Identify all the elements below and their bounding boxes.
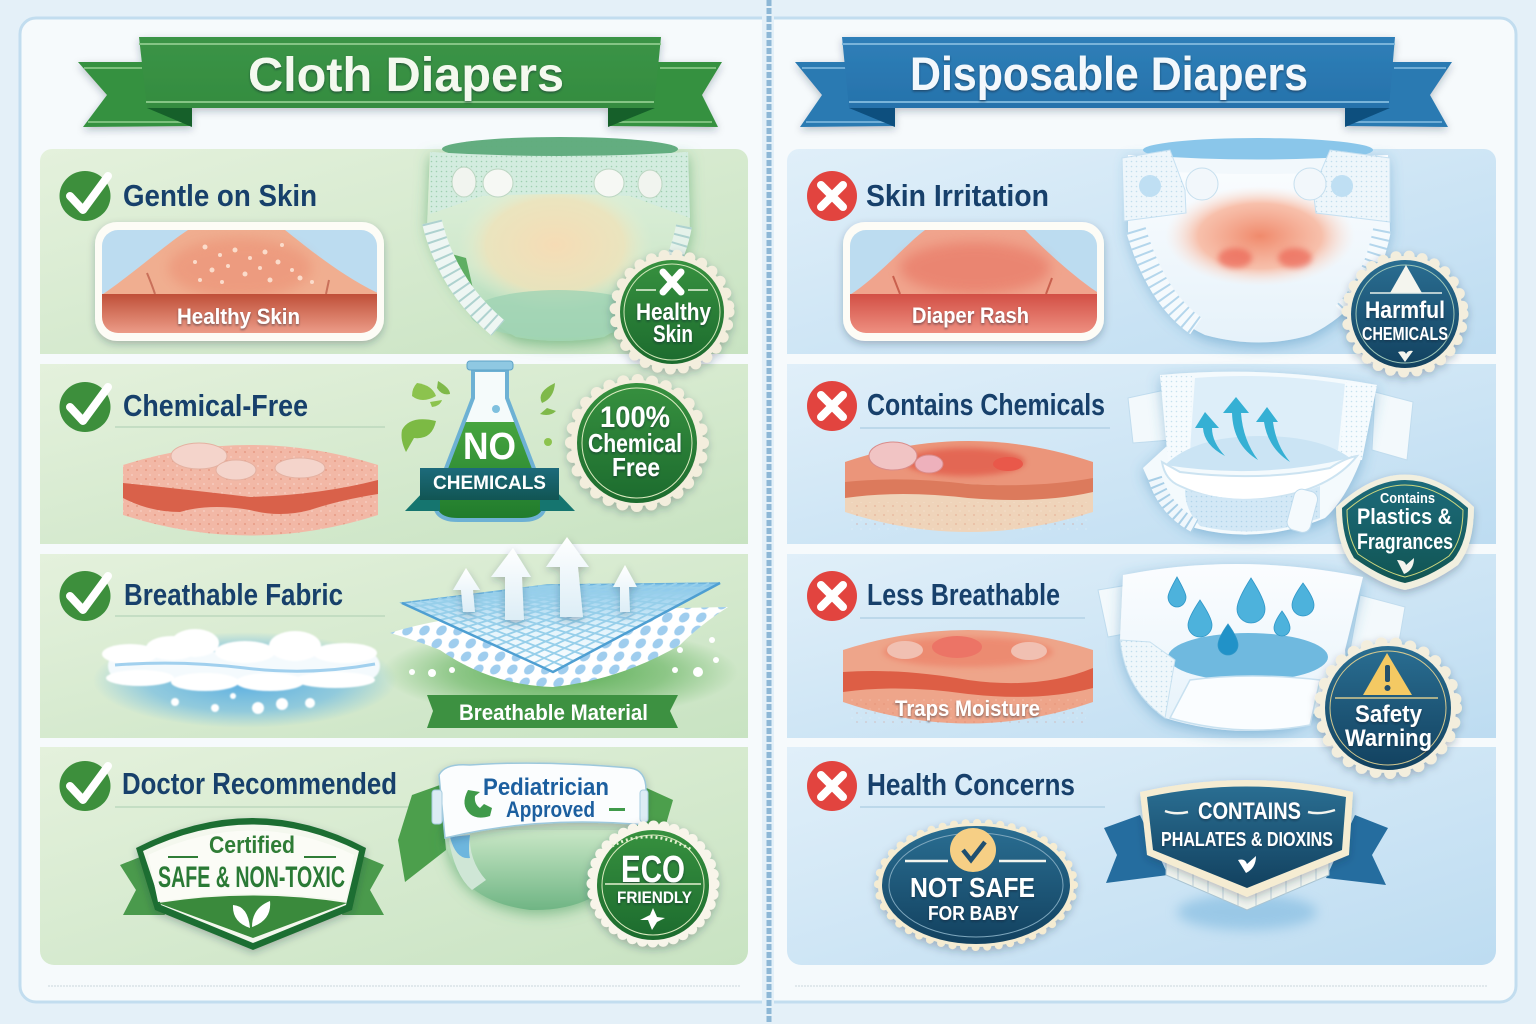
heading: Gentle on Skin: Gentle on Skin [123, 178, 317, 213]
label: SAFE & NON-TOXIC: SAFE & NON-TOXIC [158, 861, 345, 894]
heading: Health Concerns: Health Concerns [867, 767, 1075, 802]
badge: Eco Friendly: ECO [621, 849, 685, 891]
heading: Doctor Recommended: Doctor Recommended [122, 766, 397, 801]
badge: 100% Chemical Free: Chemical [588, 428, 682, 458]
badge: Harmful Chemicals [1347, 256, 1463, 372]
icon: check [60, 171, 110, 221]
icon: cross [807, 171, 857, 221]
badge: Contains Plastics and Fragrances: Fragrances [1357, 529, 1453, 554]
heading: Contains Chemicals: Contains Chemicals [867, 387, 1105, 422]
heading ribbon: Cloth Diapers [78, 37, 722, 127]
label: Diaper Rash: Diaper Rash [912, 303, 1029, 328]
badge: Contains Plastics and Fragrances [1336, 474, 1474, 590]
badge: Not Safe for Baby [878, 823, 1074, 947]
badge: Safety Warning [1320, 643, 1456, 773]
illustration: breathable material layers [382, 537, 738, 728]
panel: cloth diapers column [40, 37, 748, 965]
badge: Contains Phalates and Dioxins [1104, 780, 1388, 930]
heading: Less Breathable: Less Breathable [867, 577, 1060, 612]
badge: Safety Warning: Safety [1355, 701, 1423, 728]
badge: Contains Plastics and Fragrances: Plastics & [1357, 504, 1452, 529]
panel: disposable diapers column [787, 37, 1496, 965]
label: NO: NO [463, 426, 516, 468]
badge: Not Safe for Baby: FOR BABY [928, 903, 1020, 925]
illustration: irritated skin layers [845, 441, 1093, 532]
icon: check [60, 571, 110, 621]
badge: Eco Friendly: FRIENDLY [617, 888, 693, 907]
illustration: no chemicals flask [402, 361, 575, 522]
heading ribbon: Cloth Diapers: Cloth Diapers [248, 49, 564, 102]
illustration: moist skin layers [843, 630, 1093, 724]
icon: check [60, 761, 110, 811]
label: Certified: Certified [209, 832, 295, 859]
row 4: Health Concerns [807, 761, 1388, 947]
row 1: Gentle on Skin [60, 137, 729, 369]
row 3: Breathable Fabric [60, 537, 738, 728]
row 2: Contains Chemicals [807, 372, 1474, 590]
heading ribbon: Disposable Diapers: Disposable Diapers [910, 47, 1308, 100]
badge: Harmful Chemicals: Harmful [1365, 297, 1445, 324]
label: Traps Moisture: Traps Moisture [895, 696, 1040, 721]
badge: Not Safe for Baby: NOT SAFE [910, 872, 1035, 903]
illustration: pediatrician approved diaper: Pediatrician [483, 774, 609, 801]
icon: cross [807, 571, 857, 621]
badge: Healthy Skin: Skin [653, 321, 693, 348]
badge: 100% Chemical Free: Free [612, 452, 660, 482]
badge: Certified Safe and Non-Toxic [120, 818, 384, 950]
badge: Contains Phalates and Dioxins: PHALATES & DIOXINS [1161, 829, 1333, 851]
illustration: pediatrician approved diaper [398, 763, 673, 910]
row backgrounds: disposable [787, 149, 1496, 965]
heading: Chemical-Free: Chemical-Free [123, 388, 308, 423]
icon: cross [807, 381, 857, 431]
illustration: skin layers [123, 443, 378, 536]
heading: Skin Irritation: Skin Irritation [866, 178, 1049, 213]
icon: check [60, 382, 110, 432]
heading ribbon: Disposable Diapers [795, 37, 1452, 127]
center divider [762, 0, 774, 1024]
banner: Breathable Material: Breathable Material [459, 700, 648, 725]
badge: Healthy Skin [615, 255, 729, 369]
illustration: pediatrician approved diaper: Approved [506, 797, 595, 822]
row 4: Doctor Recommended [60, 761, 714, 950]
illustration: disposable diaper with fumes [1128, 372, 1413, 535]
illustration: fluffy fabric [93, 629, 397, 728]
badge: Contains Phalates and Dioxins: CONTAINS [1198, 798, 1301, 825]
badge: Safety Warning: Warning [1345, 725, 1432, 752]
row backgrounds: cloth [40, 149, 748, 965]
footer dotted rules [48, 985, 1488, 987]
badge: Healthy Skin: Healthy [636, 299, 712, 326]
badge: Harmful Chemicals: CHEMICALS [1362, 324, 1448, 344]
icon: phone [464, 790, 492, 818]
heading: Breathable Fabric: Breathable Fabric [124, 577, 343, 612]
badge: 100% Chemical Free: 100% [600, 401, 670, 434]
icon: cross [807, 761, 857, 811]
banner: Breathable Material [427, 695, 678, 728]
badge: 100% Chemical Free [571, 380, 703, 506]
badge: Contains Plastics and Fragrances: Contains [1380, 490, 1435, 507]
row 1: Skin Irritation [807, 138, 1463, 372]
label: Healthy Skin: Healthy Skin [177, 304, 300, 329]
illustration: disposable diaper with moisture [1098, 564, 1405, 731]
illustration: cloth diaper [427, 137, 690, 341]
label: CHEMICALS: CHEMICALS [433, 473, 546, 494]
illustration: diaper rash card [843, 222, 1104, 341]
illustration: healthy skin card [95, 222, 384, 341]
illustration: disposable diaper with rash [1122, 138, 1390, 342]
row 2: Chemical-Free [60, 361, 703, 536]
row 3: Less Breathable [807, 564, 1456, 773]
icon: warning triangle [1363, 653, 1412, 695]
badge: Eco Friendly [592, 826, 714, 942]
